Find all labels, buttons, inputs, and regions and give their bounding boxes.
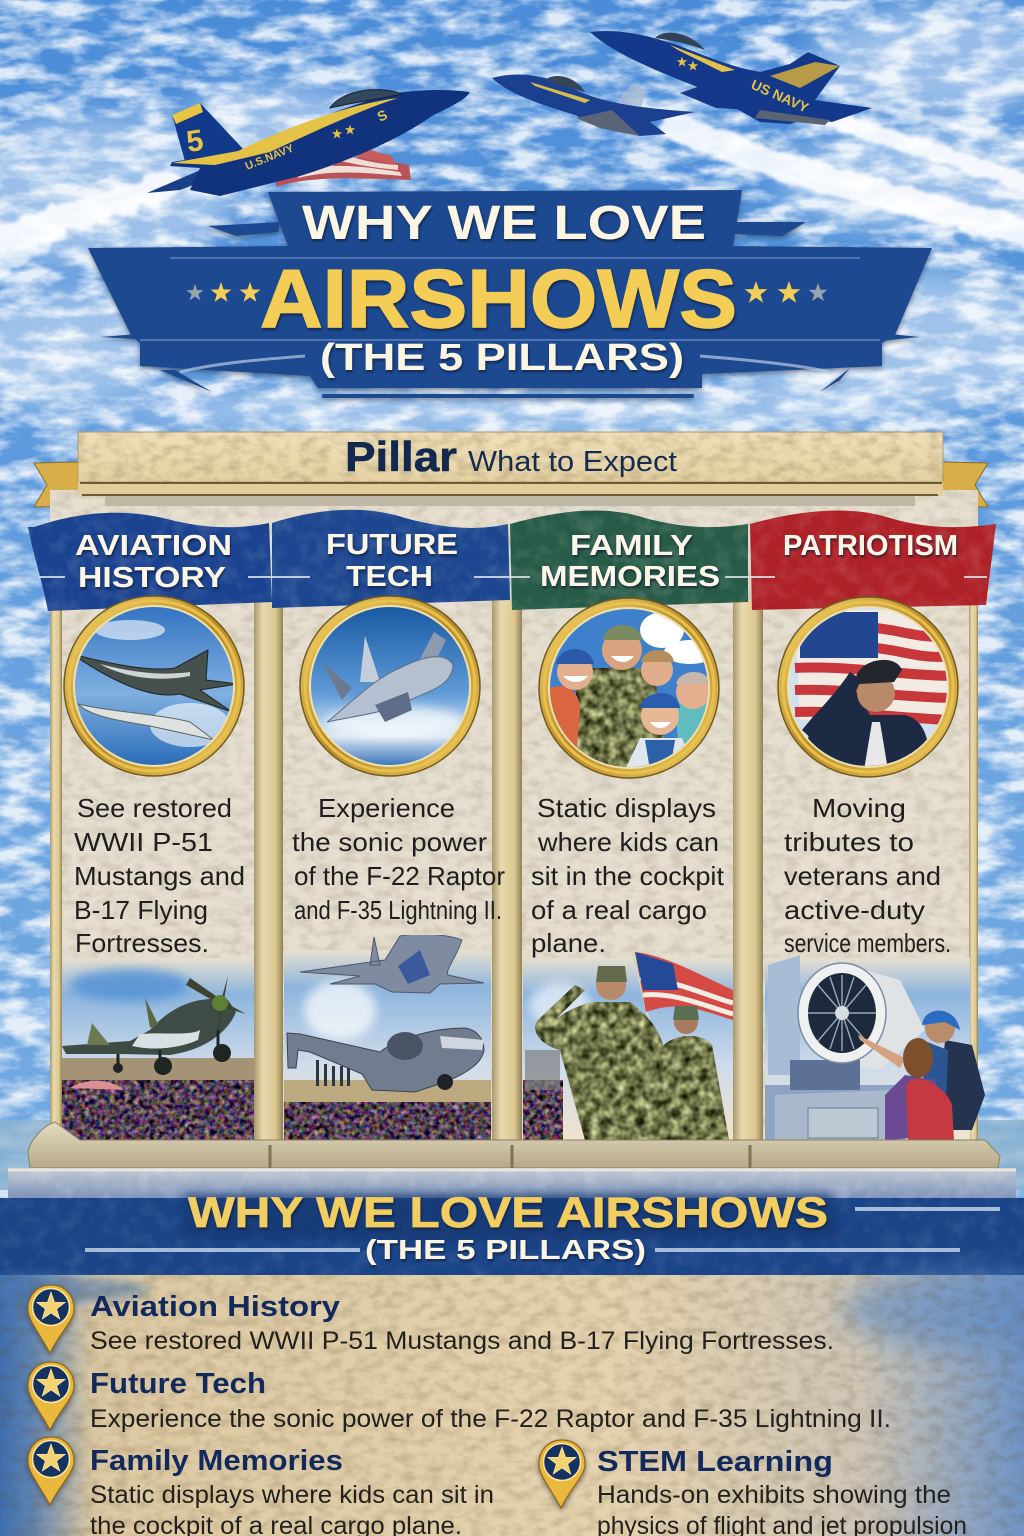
banner: HISTORY <box>78 562 226 594</box>
banner <box>28 513 272 611</box>
medallion <box>778 597 960 777</box>
jet: middle <box>492 74 695 136</box>
item: aviation history: Aviation History <box>90 1291 340 1323</box>
kids <box>858 1011 985 1140</box>
description: Fortresses. <box>75 928 209 958</box>
jet: lead with number 5: S <box>375 106 390 125</box>
medallion <box>300 596 480 776</box>
pin icon <box>28 1362 74 1430</box>
scene: jet engine exhibit and kids <box>765 955 985 1140</box>
header text: Pillar <box>345 433 457 480</box>
medallion <box>60 596 250 776</box>
description: the sonic power <box>292 827 487 857</box>
item: future tech: Future Tech <box>90 1368 266 1400</box>
pillar 1: aviation history <box>28 513 272 1140</box>
description: veterans and <box>784 861 941 891</box>
banner <box>510 510 748 610</box>
description: Mustangs and <box>74 861 245 891</box>
jet: lead with number 5: U.S.NAVY <box>244 142 296 173</box>
title stars <box>186 281 828 303</box>
description: plane. <box>531 928 606 958</box>
description: service members. <box>784 928 951 958</box>
description: See restored <box>77 793 232 823</box>
scene: soldiers saluting flag <box>523 950 733 1140</box>
description: Static displays <box>537 793 716 823</box>
description: of a real cargo <box>531 895 707 925</box>
stone wall <box>50 490 978 1150</box>
title: why we love: WHY WE LOVE <box>302 197 706 250</box>
banner: MEMORIES <box>540 561 720 593</box>
item: future tech: Experience the sonic power of the F-22 Raptor and F-35 Lightning II. <box>90 1405 891 1433</box>
description: tributes to <box>784 827 914 857</box>
column base and plinth <box>8 1122 1016 1198</box>
description <box>292 793 505 925</box>
item: aviation history <box>28 1285 834 1355</box>
description: active-duty <box>784 895 925 925</box>
flag behind lead jet <box>276 142 411 187</box>
parchment summary panel <box>0 1272 1024 1536</box>
medallion <box>539 598 720 778</box>
flag <box>795 610 950 720</box>
item: stem learning: Hands-on exhibits showing the <box>597 1481 951 1509</box>
pin icon <box>28 1285 74 1353</box>
description <box>784 793 951 958</box>
flag <box>632 950 733 1020</box>
description: sit in the cockpit <box>531 861 725 891</box>
title banner <box>88 190 932 398</box>
description: B-17 Flying <box>74 895 208 925</box>
title: the 5 pillars: (THE 5 PILLARS) <box>320 337 684 379</box>
banner <box>750 510 996 610</box>
description <box>74 793 245 958</box>
banner: FUTURE <box>326 529 458 561</box>
engine fan <box>798 963 886 1063</box>
ribbon ends <box>34 462 988 507</box>
item: family memories: Static displays where kids can sit in <box>90 1481 494 1509</box>
banner: FAMILY <box>570 530 693 562</box>
temple structure <box>34 432 988 1150</box>
title: airshows: AIRSHOWS <box>260 252 737 345</box>
item: family memories <box>28 1437 494 1536</box>
description: and F-35 Lightning II. <box>294 895 502 925</box>
description: Experience <box>318 793 455 823</box>
scene: mustang and crowd <box>62 958 254 1140</box>
description: of the F-22 Raptor <box>294 861 505 891</box>
lower banner <box>0 1189 1024 1275</box>
jet: lead with number 5 <box>147 90 470 196</box>
jet: upper right: US NAVY <box>749 76 812 116</box>
jet: upper right <box>590 31 872 125</box>
pillar 2: future tech <box>272 510 510 1140</box>
item: family memories: Family Memories <box>90 1445 343 1477</box>
banner: PATRIOTISM <box>783 530 958 562</box>
banner: TECH <box>346 561 433 593</box>
banner ribbon streaks <box>39 576 987 578</box>
entablature slab <box>78 432 943 506</box>
banner shapes <box>88 190 932 398</box>
scene: jets and cargo plane <box>284 934 491 1140</box>
contrails <box>0 100 1024 270</box>
pillar 4: patriotism <box>750 510 996 1140</box>
item: stem learning: STEM Learning <box>597 1446 833 1478</box>
banner: AVIATION <box>75 530 232 562</box>
jet: lead with number 5: 5 <box>184 124 205 159</box>
description: WWII P-51 <box>74 827 213 857</box>
banner <box>272 510 510 608</box>
description: where kids can <box>537 827 719 857</box>
pillar 3: family memories <box>510 510 748 1140</box>
gold column dividers <box>50 600 978 1150</box>
item: aviation history: See restored WWII P-51 Mustangs and B-17 Flying Fortresses. <box>90 1327 834 1355</box>
description: Moving <box>812 793 906 823</box>
description <box>531 793 725 958</box>
lower banner title: WHY WE LOVE AIRSHOWS <box>188 1189 828 1237</box>
pin icon <box>28 1437 74 1505</box>
header text <box>345 433 677 480</box>
pin icon <box>539 1440 585 1508</box>
lower banner subtitle: (THE 5 PILLARS) <box>365 1234 646 1265</box>
header text: What to Expect <box>468 446 677 478</box>
item: future tech <box>28 1362 891 1433</box>
item: stem learning <box>539 1440 967 1536</box>
